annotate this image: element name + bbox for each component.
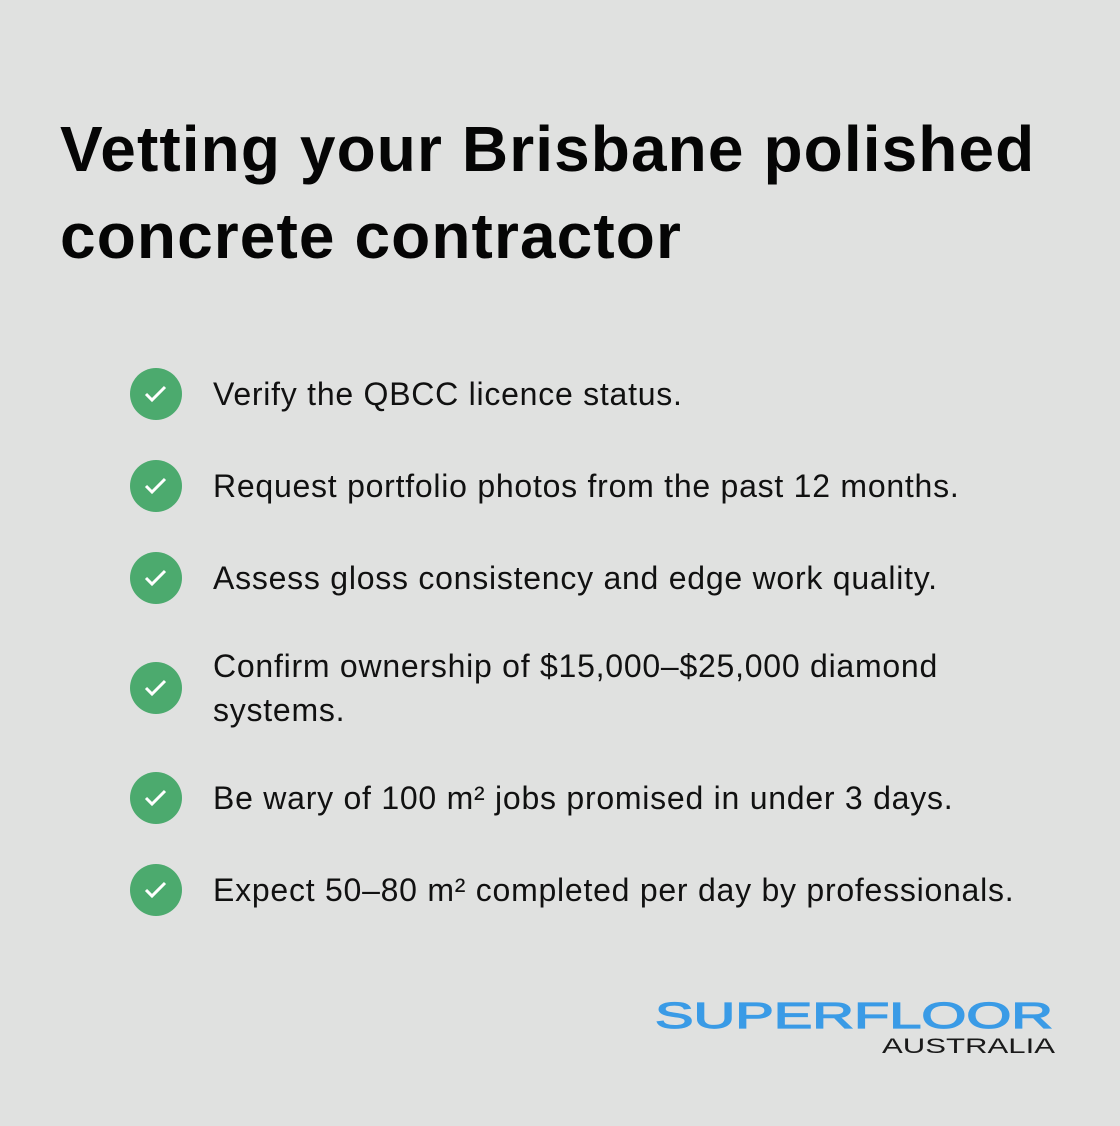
title <box>60 113 1035 272</box>
item 4: Confirm ownership of $15,000–$25,000 diamond <box>213 648 938 684</box>
title: concrete contractor <box>60 200 682 272</box>
item 1: Verify the QBCC licence status. <box>213 376 683 412</box>
item 4 <box>130 648 938 728</box>
item 4: systems. <box>213 692 345 728</box>
item 3 <box>130 552 938 604</box>
checklist <box>130 368 1014 916</box>
title: Vetting your Brisbane polished <box>60 113 1035 185</box>
logo: SUPERFLOOR <box>655 995 1053 1036</box>
item 2: Request portfolio photos from the past 12 months. <box>213 468 959 504</box>
item 3: Assess gloss consistency and edge work quality. <box>213 560 938 596</box>
item 5: Be wary of 100 m² jobs promised in under 3 days. <box>213 780 953 816</box>
item 2 <box>130 460 959 512</box>
item 6 <box>130 864 1014 916</box>
item 6: Expect 50–80 m² completed per day by professionals. <box>213 872 1014 908</box>
item 1 <box>130 368 683 420</box>
logo <box>655 995 1055 1057</box>
item 5 <box>130 772 953 824</box>
